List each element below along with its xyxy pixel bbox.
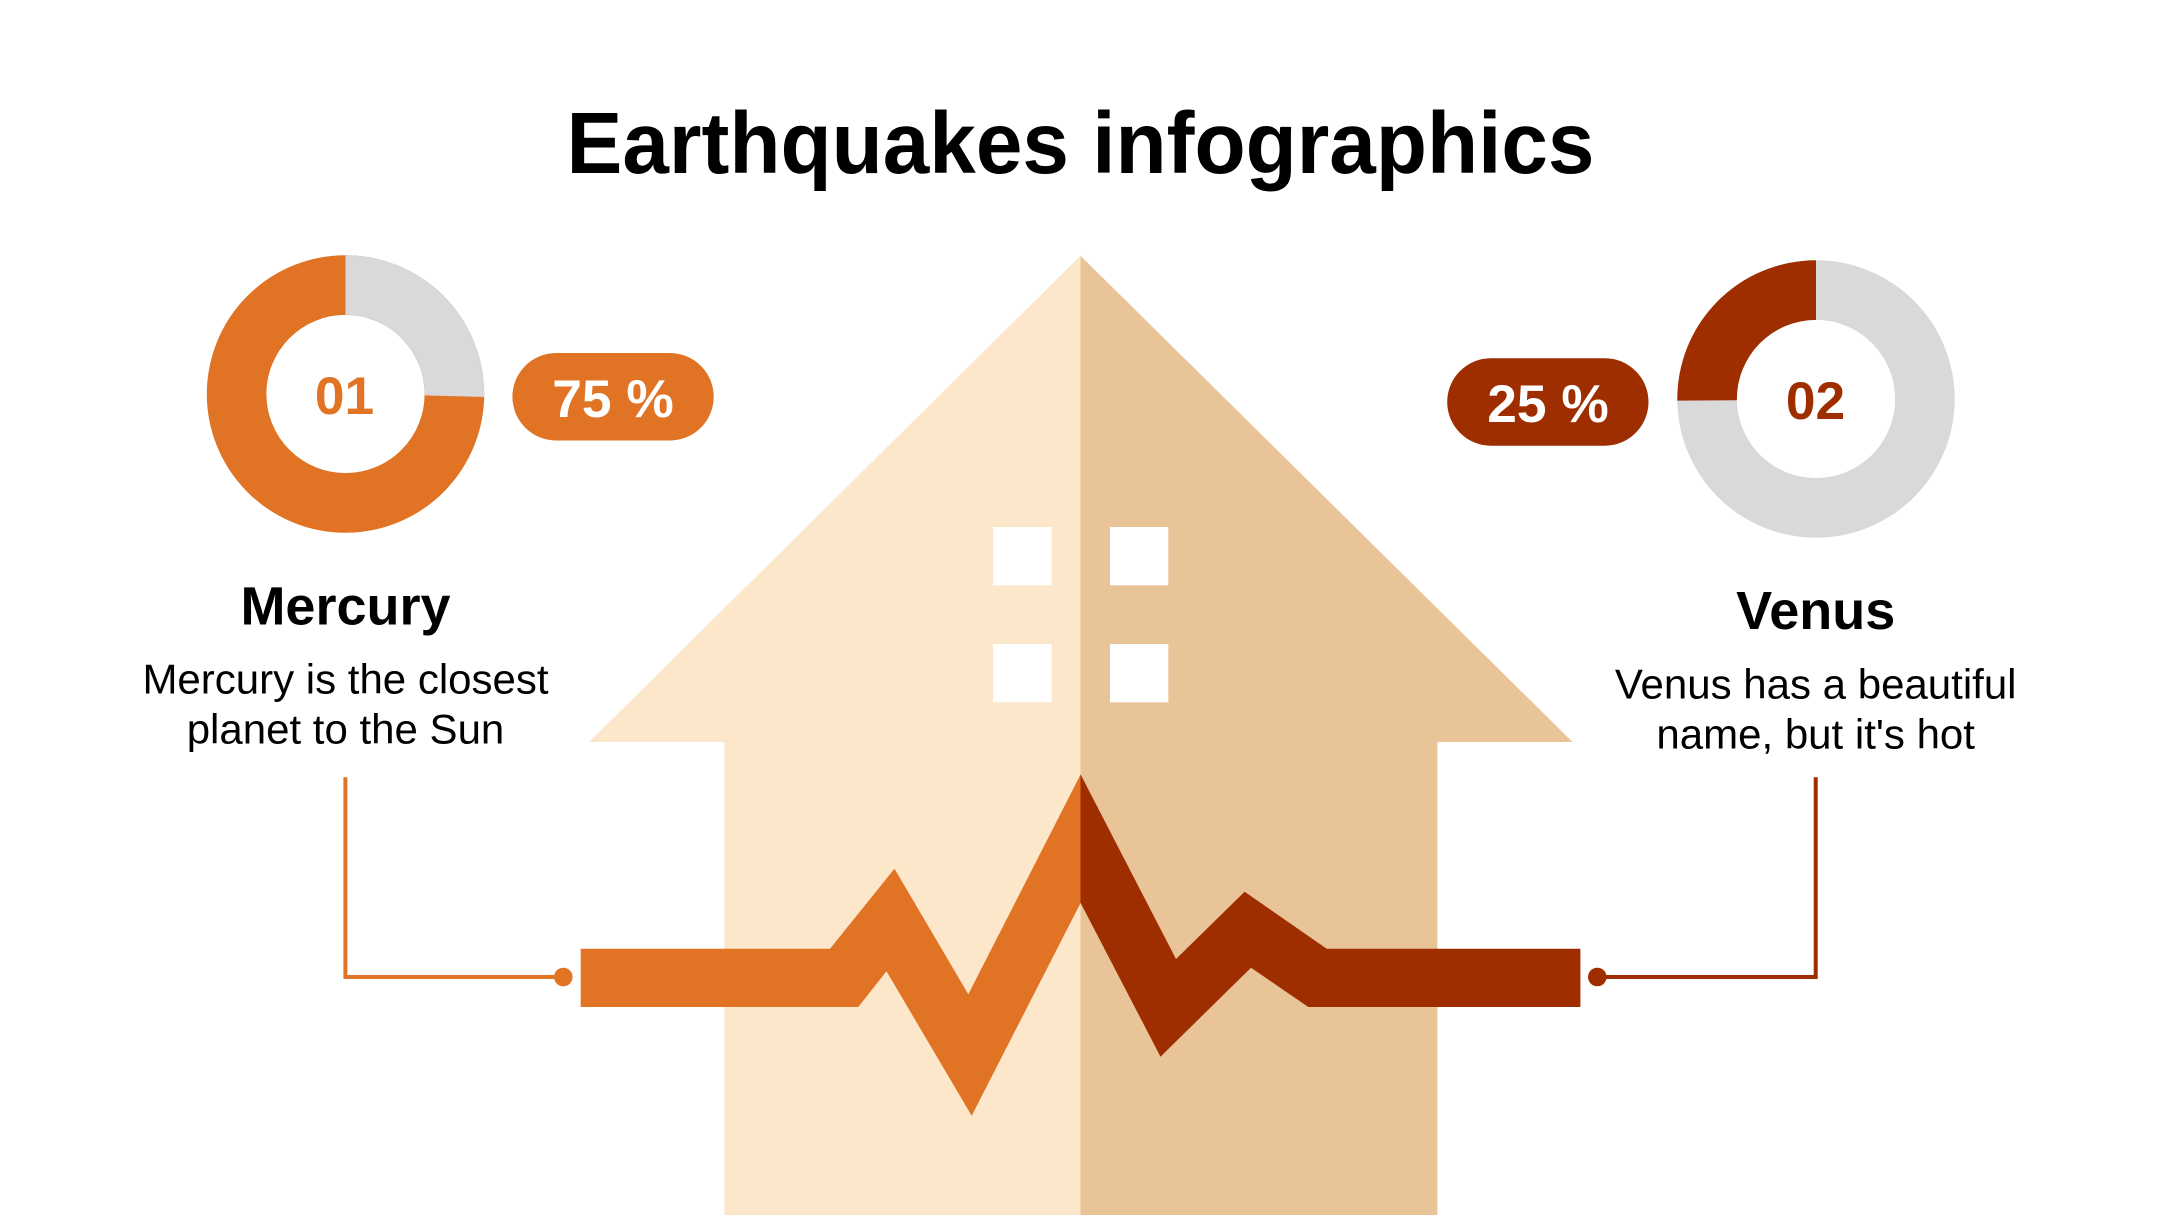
house right half [1080, 256, 1572, 1215]
panel: Venus [1447, 260, 2017, 758]
title: Earthquakes infographics [566, 95, 1594, 192]
description Mercury: Mercury is the closest [142, 655, 549, 702]
description Venus: Venus has a beautiful [1615, 661, 2017, 708]
donut number 02: 02 [1786, 372, 1845, 431]
percentage pill 75: 75 % [552, 370, 674, 429]
seismic wave right [1080, 774, 1580, 1057]
house left half [589, 256, 1080, 1215]
heading Mercury: Mercury [240, 577, 451, 637]
description Mercury: planet to the Sun [187, 705, 504, 752]
donut chart 25 percent [1677, 260, 1925, 508]
seismic wave left [581, 774, 1081, 1116]
house illustration [589, 256, 1572, 1215]
percentage pill 25 [1447, 358, 1648, 446]
percentage pill 75 [512, 353, 714, 440]
donut chart 75 percent [237, 255, 484, 503]
connector left [345, 777, 573, 986]
panel: Mercury [142, 255, 714, 752]
heading Venus: Venus [1736, 581, 1895, 641]
house windows [993, 527, 1168, 702]
percentage pill 25: 25 % [1487, 375, 1609, 434]
description Venus: name, but it's hot [1656, 711, 1975, 758]
connector right [1588, 777, 1816, 986]
donut number 01: 01 [315, 367, 374, 426]
